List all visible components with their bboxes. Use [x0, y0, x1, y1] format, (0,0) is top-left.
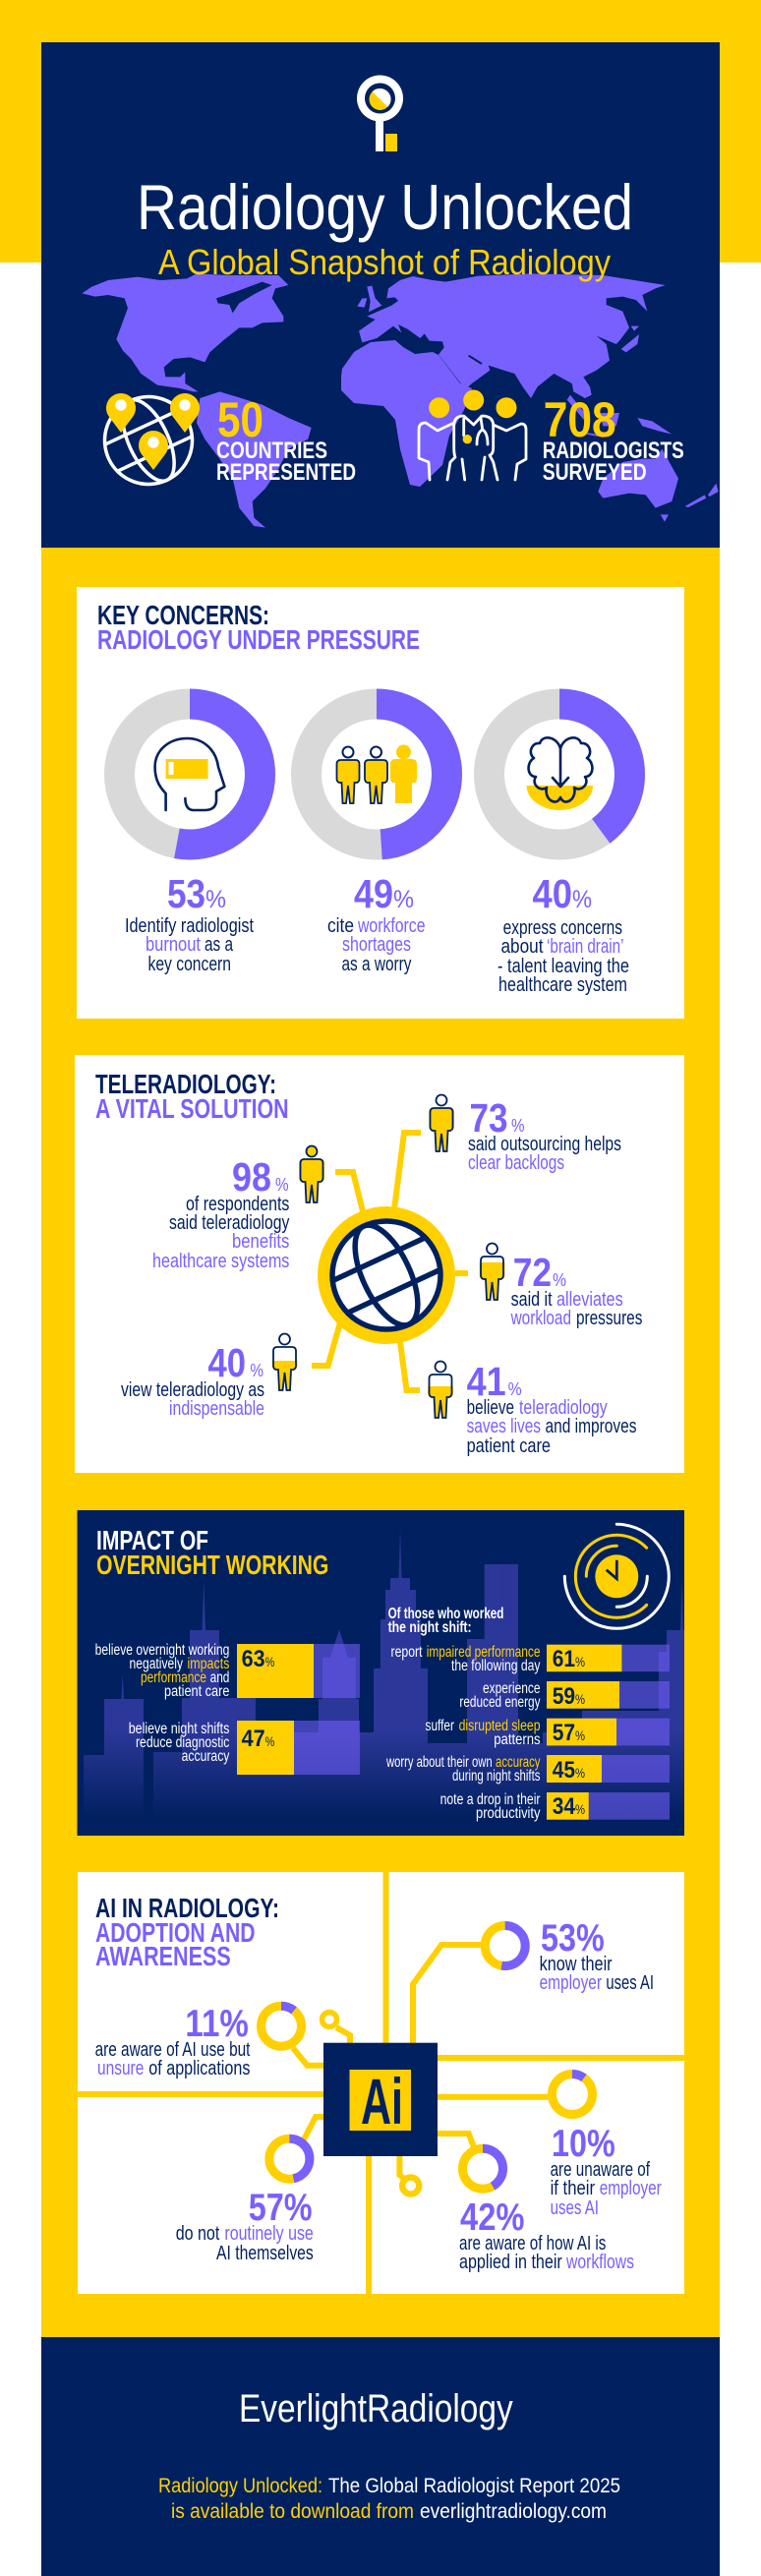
text: 40%: 40 — [533, 871, 572, 916]
text: 49%: cite — [327, 914, 354, 937]
right bars: % — [575, 1654, 585, 1669]
right labels: during night shifts — [452, 1768, 541, 1785]
right labels: accuracy — [496, 1754, 541, 1771]
stat: 10%: uses AI — [551, 2196, 599, 2219]
stat: 41%: patient care — [467, 1434, 551, 1457]
heading: ADOPTION AND — [95, 1917, 256, 1948]
right labels: the following day — [451, 1658, 541, 1674]
panel: AI in radiology — [78, 1872, 684, 2294]
text: 49% — [327, 871, 425, 975]
circuit connectors — [293, 1945, 551, 2195]
donut: 40% brain drain — [490, 704, 629, 845]
stat: 57%: routinely use — [224, 2222, 314, 2245]
heading — [95, 1893, 279, 1971]
donut: 53% burnout — [120, 704, 260, 845]
stat: 57%: do not — [176, 2222, 220, 2245]
text: 40%: ‘brain drain’ — [547, 935, 623, 958]
left labels: performance — [141, 1669, 206, 1686]
stat: 708 radiologists: RADIOLOGISTS — [543, 438, 684, 464]
text: 40%: % — [572, 886, 592, 913]
stat: 41% — [428, 1359, 637, 1457]
stat: 11% — [95, 2003, 301, 2079]
stat: 72% — [480, 1243, 642, 1329]
stat: 40%: indispensable — [169, 1397, 264, 1420]
left labels: believe overnight working — [95, 1642, 229, 1659]
stat: 10% — [551, 2075, 662, 2219]
stat: 41%: believe — [467, 1396, 514, 1419]
text: 53%: key concern — [147, 953, 231, 975]
stat: 98%: % — [275, 1175, 289, 1195]
right bars: 59 — [553, 1683, 575, 1710]
right labels: patterns — [494, 1731, 541, 1748]
text: 53%: as a — [205, 933, 233, 956]
right labels: reduced energy — [459, 1694, 541, 1711]
stat: 53%: employer — [540, 1971, 602, 1994]
connector lines — [312, 1133, 468, 1390]
text: 49%: 49 — [354, 871, 393, 916]
right labels: impaired performance — [427, 1644, 541, 1661]
right bars: % — [575, 1727, 585, 1743]
left bars: 47 — [242, 1726, 265, 1752]
title: Radiology Unlocked — [137, 171, 633, 243]
right labels: experience — [483, 1680, 541, 1697]
icon: globe hub — [318, 1204, 455, 1346]
dividing bars — [78, 1872, 684, 2294]
stat: 40% — [121, 1333, 297, 1420]
download note: is available to download from — [171, 2500, 414, 2523]
left labels: accuracy — [182, 1748, 230, 1765]
right labels: suffer — [425, 1718, 454, 1734]
download note: Radiology Unlocked: — [158, 2475, 322, 2497]
right bars: % — [575, 1801, 585, 1817]
stat: 42%: applied in their — [459, 2251, 562, 2273]
right labels: worry about their own — [385, 1754, 493, 1771]
right labels: report — [391, 1644, 423, 1661]
stat: 53%: know their — [540, 1953, 613, 1975]
panel: teleradiology — [75, 1055, 684, 1473]
heading — [96, 1525, 328, 1580]
stat: 40%: view teleradiology as — [121, 1378, 264, 1401]
text: 49%: as a worry — [342, 953, 412, 975]
stat: 42%: are aware of how AI is — [459, 2232, 606, 2254]
stat: 50 countries: REPRESENTED — [216, 459, 356, 486]
right labels: note a drop in their — [440, 1791, 541, 1808]
stat: 98%: of respondents — [186, 1193, 289, 1215]
right bars: 57 — [553, 1720, 575, 1746]
donut: 49% workforce — [307, 704, 446, 845]
download note: everlightradiology.com — [420, 2500, 607, 2523]
stat: 57%: 57% — [249, 2187, 313, 2229]
right bars — [547, 1645, 670, 1820]
text: 49%: % — [393, 886, 414, 913]
logo: magnifier key — [357, 75, 403, 151]
left labels — [95, 1642, 230, 1765]
stat: 40%: 40 — [208, 1340, 246, 1385]
icon: brain drain — [527, 737, 593, 810]
icon: globe with pins — [90, 382, 206, 498]
download note — [158, 2475, 620, 2523]
stat: 11%: are aware of AI use but — [95, 2038, 251, 2061]
stat: 42%: 42% — [460, 2196, 525, 2239]
stat: 72%: said it — [511, 1288, 553, 1311]
stat: 42% — [459, 2148, 634, 2273]
left bars: % — [265, 1733, 274, 1749]
stat: 73%: 73 — [470, 1095, 507, 1141]
download note: The Global Radiologist Report 2025 — [328, 2475, 620, 2497]
stat: 73%: % — [511, 1116, 525, 1136]
stat: 40%: % — [250, 1361, 263, 1380]
right labels — [385, 1644, 541, 1822]
heading: OVERNIGHT WORKING — [96, 1550, 328, 1580]
stat: 73%: said outsourcing helps — [468, 1133, 621, 1155]
left labels: and — [210, 1669, 229, 1686]
city skyline — [77, 1529, 684, 1836]
text: 49%: workforce — [357, 914, 425, 937]
right subheading: Of those who worked — [388, 1606, 503, 1622]
right bars: 34 — [553, 1793, 576, 1820]
icon: clock with orbit arcs — [564, 1524, 669, 1628]
stat: 98%: healthcare systems — [152, 1250, 289, 1272]
stat: 53% — [485, 1917, 654, 1994]
stat: 42%: workflows — [565, 2251, 634, 2273]
stat: 50 countries — [216, 392, 356, 486]
africa — [341, 340, 472, 487]
left labels: negatively — [130, 1656, 183, 1672]
stat: 73%: clear backlogs — [468, 1151, 564, 1174]
stat: 57%: AI themselves — [216, 2242, 314, 2264]
right subheading: the night shift: — [388, 1619, 472, 1636]
stat: 98%: said teleradiology — [169, 1211, 290, 1234]
stat: 98% — [152, 1146, 324, 1272]
panel: key concerns — [77, 587, 684, 1019]
heading — [95, 1069, 289, 1124]
left labels: impacts — [187, 1656, 230, 1672]
right subheading — [388, 1606, 503, 1636]
heading: RADIOLOGY UNDER PRESSURE — [97, 624, 420, 655]
panel: footer — [41, 2337, 720, 2576]
stat: 10%: employer — [600, 2177, 662, 2199]
brand name: EverlightRadiology — [239, 2387, 513, 2430]
panel: overnight working — [77, 1510, 684, 1836]
left labels: patient care — [164, 1683, 229, 1700]
stat: 41%: % — [508, 1379, 522, 1399]
text: 40%: - talent leaving the — [498, 955, 629, 977]
stat: 53%: uses AI — [606, 1971, 654, 1994]
stat: 50 countries: COUNTRIES — [216, 438, 327, 464]
stat: 50 countries: 50 — [217, 392, 263, 447]
heading — [97, 600, 420, 655]
world map — [82, 273, 719, 528]
text: 40% — [498, 871, 629, 996]
stat: 11%: of applications — [148, 2057, 250, 2079]
text: 40%: about — [501, 935, 544, 958]
stat: 708 radiologists: 708 — [544, 392, 616, 447]
text: 53% — [125, 871, 254, 975]
right labels: disrupted sleep — [459, 1718, 541, 1734]
heading: AWARENESS — [95, 1941, 231, 1971]
stat: 98%: 98 — [232, 1154, 271, 1200]
stat: 72%: 72 — [513, 1250, 552, 1295]
stat: 41%: saves lives — [467, 1415, 541, 1437]
stat: 72%: % — [553, 1270, 566, 1290]
heading: TELERADIOLOGY: — [95, 1069, 276, 1099]
chip: Ai: Ai — [361, 2065, 403, 2137]
heading: A VITAL SOLUTION — [95, 1093, 289, 1124]
icon: head with low battery — [155, 738, 224, 810]
text: 49%: shortages — [342, 933, 411, 956]
left labels: reduce diagnostic — [136, 1734, 230, 1751]
right bars: % — [575, 1765, 585, 1781]
text: 53%: % — [205, 886, 226, 913]
stat: 98%: benefits — [232, 1230, 289, 1253]
text: 53%: burnout — [146, 933, 201, 956]
right labels: productivity — [476, 1805, 541, 1822]
right bars: % — [575, 1691, 585, 1707]
left labels: believe night shifts — [129, 1721, 230, 1737]
stat: 72%: pressures — [576, 1307, 642, 1329]
stat: 41%: 41 — [467, 1359, 506, 1404]
chip: Ai — [323, 2043, 438, 2156]
stat: 73% — [429, 1095, 621, 1174]
stat: 11%: 11% — [185, 2003, 249, 2045]
stat: 10%: 10% — [552, 2123, 615, 2165]
stat: 708 radiologists — [543, 392, 684, 486]
right bars: 45 — [553, 1757, 575, 1784]
left bars: 63 — [242, 1646, 265, 1672]
left bars: % — [265, 1654, 274, 1669]
right bars: 61 — [553, 1646, 575, 1672]
panel: header — [41, 42, 720, 548]
stat: 53%: 53% — [541, 1917, 605, 1960]
stat: 72%: alleviates — [556, 1288, 623, 1311]
stat: 41%: and improves — [545, 1415, 637, 1437]
text: 53%: 53 — [167, 871, 205, 916]
text: 40%: healthcare system — [498, 973, 627, 996]
stat: 41%: teleradiology — [519, 1396, 608, 1419]
heading: KEY CONCERNS: — [97, 600, 269, 630]
text: 40%: express concerns — [503, 916, 622, 939]
stat: 57% — [176, 2138, 314, 2264]
subtitle: A Global Snapshot of Radiology — [158, 242, 611, 282]
heading: AI IN RADIOLOGY: — [95, 1893, 279, 1923]
left bars — [237, 1644, 360, 1775]
text: 53%: Identify radiologist — [125, 914, 254, 937]
stat: 10%: are unaware of — [551, 2158, 650, 2181]
stat: 708 radiologists: SURVEYED — [543, 459, 647, 486]
heading: IMPACT OF — [96, 1525, 208, 1555]
stat: 72%: workload — [510, 1307, 571, 1329]
icon: radiologists group — [419, 389, 526, 480]
stat: 11%: unsure — [97, 2057, 144, 2079]
stat: 10%: if their — [551, 2177, 595, 2199]
icon: three people — [336, 745, 417, 803]
